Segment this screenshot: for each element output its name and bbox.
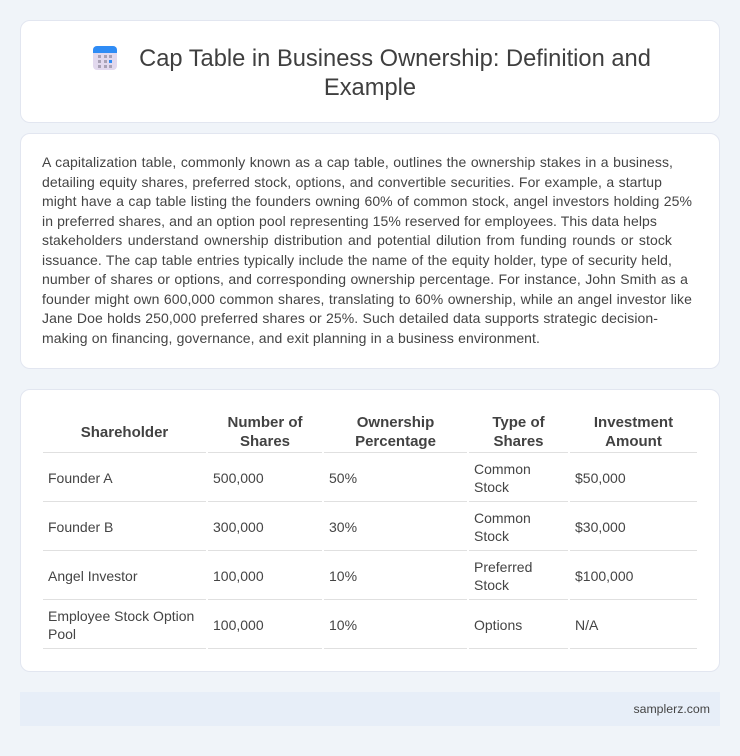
- panel: description card: [20, 133, 720, 369]
- table row: Angel Investor: $100,000: [575, 568, 633, 584]
- title: [139, 46, 651, 101]
- title: Cap Table in Business Ownership: Definition and: [139, 46, 651, 72]
- table row: Angel Investor: 10%: [329, 568, 357, 584]
- footer bar: [20, 692, 720, 726]
- table row: Founder B: [43, 510, 697, 551]
- table header: Type of: [492, 414, 545, 431]
- table row: Founder B: $30,000: [575, 519, 626, 535]
- table row: Founder A: Stock: [474, 479, 509, 495]
- text block: description: detailing equity shares, preferred stock, options, and convertible securities. For example, a startup: [42, 174, 662, 190]
- text block: description: number of shares or options, and corresponding ownership percentage. For instance, John Smith as a: [42, 271, 688, 287]
- footer text: samplerz.com: samplerz.com: [633, 702, 710, 716]
- table row: Founder B: Stock: [474, 528, 509, 544]
- text block: description: might have a cap table listing the founders owning 60% of common stock, angel investors holding 25%: [42, 193, 692, 209]
- table row: Employee Stock Option Pool: 100,000: [213, 617, 264, 633]
- table row: Founder A: 500,000: [213, 470, 264, 486]
- table row: Angel Investor: [43, 559, 697, 600]
- table header: Shares: [493, 433, 544, 450]
- table row: Employee Stock Option Pool: Pool: [48, 626, 76, 642]
- title: Example: [324, 75, 416, 101]
- text block: description: A capitalization table, commonly known as a cap table, outlines the ownership stakes in a business,: [42, 154, 673, 170]
- table row: Founder B: 30%: [329, 519, 357, 535]
- table: cap table: [43, 414, 697, 649]
- table row: Founder A: [43, 461, 697, 502]
- table row: Angel Investor: Preferred: [474, 559, 532, 575]
- table header: Number of: [228, 414, 302, 431]
- table row: Employee Stock Option Pool: Options: [474, 617, 522, 633]
- table header: Amount: [605, 433, 662, 450]
- table row: Angel Investor: Angel Investor: [48, 568, 138, 584]
- table row: Employee Stock Option Pool: Employee Stock Option: [48, 608, 194, 624]
- table header: Shareholder: [81, 424, 168, 441]
- table header: Ownership: [357, 414, 434, 431]
- table row: Angel Investor: Stock: [474, 577, 509, 593]
- text block: description: [42, 154, 692, 346]
- table row: Employee Stock Option Pool: 10%: [329, 617, 357, 633]
- table row: Founder B: Founder B: [48, 519, 113, 535]
- table header: [43, 414, 697, 453]
- table row: Founder A: 50%: [329, 470, 357, 486]
- table row: Employee Stock Option Pool: N/A: [575, 617, 598, 633]
- table row: Employee Stock Option Pool: [43, 608, 697, 649]
- text block: description: founder might own 600,000 common shares, translating to 60% ownership, while an angel investor like: [42, 291, 692, 307]
- table row: Angel Investor: 100,000: [213, 568, 264, 584]
- table header: Investment: [594, 414, 673, 431]
- table header: Shares: [240, 433, 290, 450]
- table row: Founder A: $50,000: [575, 470, 626, 486]
- table row: Founder A: Founder A: [48, 470, 113, 486]
- text block: description: stakeholders understand ownership distribution and potential dilution from funding rounds or stock: [42, 232, 672, 248]
- text block: description: making on financing, governance, and exit planning in a business environment.: [42, 330, 540, 346]
- icon: calendar grid: [93, 46, 117, 70]
- text block: description: in preferred shares, and an option pool representing 15% reserved for employees. This data helps: [42, 213, 657, 229]
- table row: Founder A: Common: [474, 461, 531, 477]
- table row: Founder B: 300,000: [213, 519, 264, 535]
- table header: Percentage: [355, 433, 436, 450]
- panel: table card: [20, 389, 720, 672]
- table row: Founder B: Common: [474, 510, 531, 526]
- text block: description: issuance. The cap table entries typically include the name of the equity holder, type of security held,: [42, 252, 672, 268]
- text block: description: Jane Doe holds 250,000 preferred shares or 25%. Such detailed data supports strategic decision-: [42, 310, 658, 326]
- panel: title card: [20, 20, 720, 123]
